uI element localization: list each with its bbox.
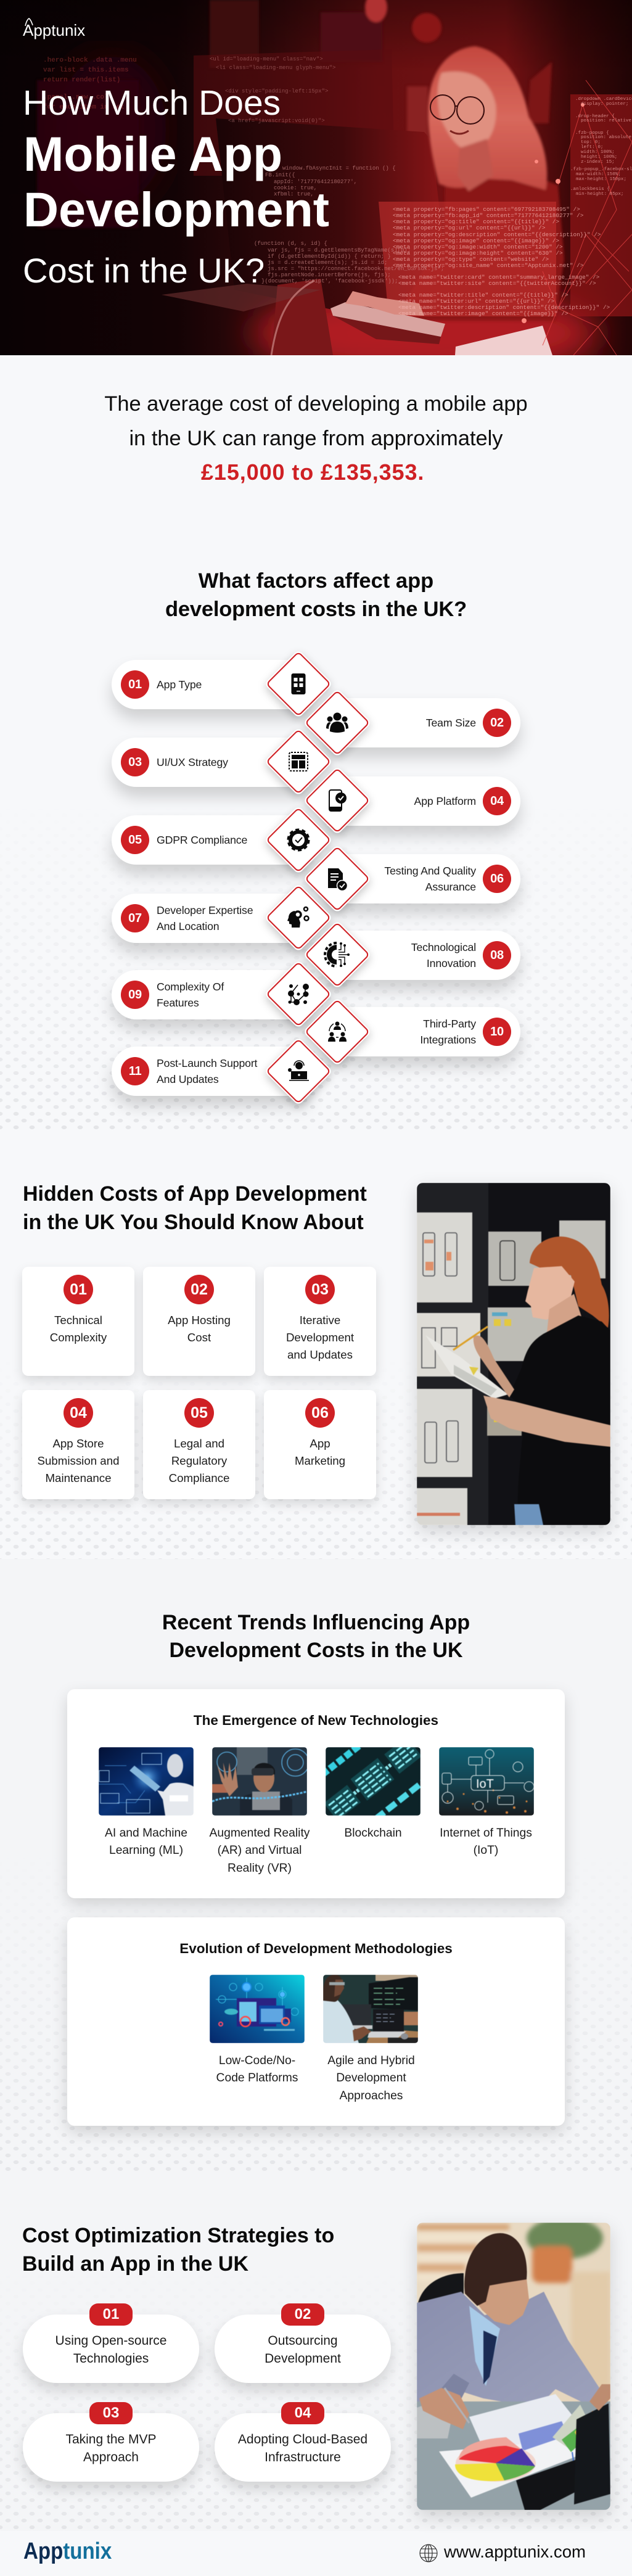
image: IoT: IoT (476, 1777, 494, 1791)
panel: hidden cost cards (18, 1273, 380, 1507)
caption: blockchain: Blockchain (344, 1827, 402, 1840)
card 02: Cost (187, 1331, 211, 1344)
hero photo: woman coding with red overlay: js.src = "https://connect.facebook.net/en_US/sdk.js"; (268, 266, 444, 272)
panel: strategy pills (18, 2303, 395, 2494)
caption: AR and VR: (AR) and Virtual (218, 1844, 302, 1857)
factor 06: Testing And Quality (384, 865, 476, 877)
card 04: App Store (52, 1437, 104, 1450)
strategy 01: 01 (103, 2306, 119, 2323)
caption: low-code platforms: Low-Code/No- (219, 2054, 295, 2067)
factor 09: 09 (128, 988, 142, 1002)
icon: technological innovation (302, 923, 372, 993)
hero photo: woman coding with red overlay: for each item in set (43, 104, 125, 111)
photo: woman reviewing wireframes (417, 1183, 610, 1525)
icon: developer expertise (263, 886, 334, 956)
code text: <meta name="twitter:card" content="summary_large_image" /> (398, 274, 600, 281)
factor 08: Innovation (427, 957, 476, 969)
hero photo: woman coding with red overlay: var js, fjs = d.getElementsByTagName(s)[0]; (268, 247, 411, 253)
card 04 (22, 1390, 134, 1499)
logo arc (25, 19, 33, 26)
hero photo: woman coding with red overlay: window.fbAsyncInit = function () { (282, 165, 396, 171)
section background: hidden costs (0, 1459, 632, 1559)
card 04: 04 (70, 1404, 87, 1422)
hero photo: woman coding with red overlay: appId: '717776412180277', (274, 179, 357, 185)
factor 11: Post-Launch Support (157, 1057, 257, 1069)
code text: <meta property="og:site_name" content="Apptunix.net" /> (393, 262, 584, 269)
code text: <meta name="twitter:description" content="{{description}}" /> (398, 304, 610, 311)
strategy 02 (210, 2303, 395, 2395)
factor 07: 07 (128, 911, 142, 925)
hero photo: woman coding with red overlay: <div style="padding-left:15px"> (225, 88, 328, 94)
caption: IoT (440, 1827, 532, 1857)
card 06: App (310, 1437, 330, 1450)
monitor (216, 118, 445, 321)
hero photo: woman coding with red overlay: top: 0; (581, 140, 601, 145)
caption: IoT: (IoT) (474, 1844, 498, 1857)
caption: low-code platforms: Code Platforms (216, 2072, 298, 2084)
hero photo: woman coding with red overlay: min-height: 85px; (576, 192, 623, 197)
card 03: Iterative (300, 1314, 340, 1327)
hero photo: woman coding with red overlay: .drop-header { (575, 114, 615, 119)
hero photo: woman coding with red overlay: max-height: 150px; (576, 177, 626, 182)
card 05: Compliance (169, 1471, 229, 1484)
hero photo: woman coding with red overlay: .anlockbesis { (570, 187, 610, 192)
code text: <meta property="og:title" content="{{title}}" /> (393, 218, 559, 225)
hero photo: woman coding with red overlay: height: 100%; (581, 155, 617, 160)
factor 07 (112, 894, 309, 943)
factor 07: And Location (157, 920, 219, 932)
hero photo: woman coding with red overlay: z-index: 15; (581, 160, 615, 165)
icon: third-party integrations (302, 999, 372, 1070)
hero photo: woman coding with red overlay: .hero-block .data .menu (43, 57, 137, 64)
icon: globe (419, 2545, 438, 2562)
card 06 (264, 1390, 376, 1499)
factor 01: 01 (128, 678, 142, 691)
code text: <meta property="fb:app_id" content="717776412180277" /> (393, 212, 584, 219)
heading: hidden costs (23, 1182, 367, 1234)
factor 04 (327, 776, 520, 826)
strategy 02: 02 (295, 2306, 311, 2323)
factor 07: Developer Expertise (157, 904, 253, 916)
factor 09 (112, 970, 309, 1019)
card 01 (22, 1267, 134, 1376)
caption: agile and hybrid: Approaches (340, 2089, 403, 2102)
hero photo: woman coding with red overlay: display: pointer; (581, 102, 628, 107)
logo: Apptunix (23, 21, 85, 39)
heading: hidden costs: in the UK You Should Know About (23, 1211, 364, 1234)
factor 01: App Type (157, 678, 202, 691)
woman (395, 46, 564, 321)
factor 09: Complexity Of (157, 981, 224, 993)
icon: testing and QA (302, 846, 372, 917)
hero photo: woman coding with red overlay: js = d.createElement(s); js.id = id; (268, 260, 387, 266)
factor 08 (327, 931, 520, 980)
strategy 04: Infrastructure (265, 2450, 341, 2464)
strategy 04 (210, 2402, 395, 2494)
translucent code panel (194, 49, 395, 176)
heading: cost optimization: Cost Optimization Strategies to (22, 2224, 334, 2247)
panel: evolution of development methodologies (67, 1917, 565, 2126)
code text: <meta property="og:image:height" content="630" /> (393, 250, 563, 257)
caption: AI and ML (105, 1827, 187, 1857)
factor 08: Technological (411, 941, 476, 953)
code text: <meta property="og:url" content="{{url}}" /> (393, 224, 546, 231)
factor 10: 10 (490, 1025, 504, 1039)
strategy 03: 03 (103, 2405, 119, 2421)
intro statement: in the UK can range from approximately (129, 427, 503, 450)
factor 10: Third-Party (423, 1018, 476, 1030)
heading: factors: What factors affect app (199, 569, 433, 593)
factor 03: UI/UX Strategy (157, 756, 228, 768)
icon: UI/UX strategy (263, 729, 334, 800)
caption: agile and hybrid: Development (336, 2072, 406, 2084)
factor 09: Features (157, 997, 199, 1009)
image: IoT (439, 1747, 534, 1816)
factor 08: 08 (490, 949, 504, 962)
image: agile and hybrid development (323, 1975, 418, 2043)
code text: <meta name="twitter:title" content="{{title}}" /> (398, 292, 568, 298)
image: low-code platforms (210, 1975, 305, 2043)
card 05: Legal and (174, 1437, 224, 1450)
hero photo: woman coding with red overlay (25, 0, 632, 1021)
card 01: Complexity (50, 1331, 107, 1344)
hero photo: woman coding with red overlay: cookie: true, (274, 185, 317, 191)
code text: <meta name="twitter:site" content="{{twitterAccount}}" /> (398, 280, 596, 287)
factor 06 (327, 854, 520, 903)
factor 02: 02 (490, 716, 504, 730)
caption: low-code platforms (216, 2054, 298, 2084)
factor 11 (112, 1047, 309, 1096)
caption: agile and hybrid (327, 2054, 415, 2102)
image: AR and VR (212, 1747, 307, 1816)
hands and keyboard (330, 302, 445, 337)
caption: IoT: Internet of Things (440, 1827, 532, 1840)
code text (393, 206, 610, 317)
photo: businessman reviewing charts (417, 2223, 610, 2510)
hero photo: woman coding with red overlay: <li class="loading-menu glyph-menu"> (216, 65, 335, 71)
hero photo: woman coding with red overlay: (function (d, s, id) { (254, 241, 327, 247)
heading: recent trends: Development Costs in the UK (169, 1639, 463, 1662)
code text: <meta property="og:image" content="{{image}}" /> (393, 237, 559, 244)
factor 10 (327, 1007, 520, 1056)
card 03 (264, 1267, 376, 1376)
caption: AR and VR (210, 1827, 310, 1875)
heading: cost optimization (22, 2224, 334, 2276)
code text: <meta property="og:description" content="{{description}}" /> (393, 231, 601, 238)
heading: recent trends (162, 1611, 470, 1662)
intro statement: The average cost of developing a mobile app (104, 392, 528, 416)
panel: emergence of new technologies (67, 1689, 565, 1898)
card 02 (143, 1267, 255, 1376)
bright code overlay (379, 202, 556, 316)
strategy 02: Development (265, 2351, 341, 2366)
hero photo: woman coding with red overlay: width: 100%; (581, 150, 615, 155)
card 02: 02 (191, 1281, 208, 1298)
hero photo: woman coding with red overlay: if (d.getElementById(id)) { return; } (268, 253, 391, 260)
caption: AR and VR: Reality (VR) (228, 1862, 292, 1875)
card 03: and Updates (287, 1348, 353, 1361)
heading: recent trends: Recent Trends Influencing App (162, 1611, 470, 1634)
strategy 03: Approach (83, 2450, 139, 2464)
strategy 03 (18, 2402, 203, 2494)
intro statement: £15,000 to £135,353. (201, 459, 424, 485)
hero photo: woman coding with red overlay: <a href="javascript:void(0)"> (228, 118, 325, 124)
website url: www.apptunix.com (444, 2542, 586, 2561)
heading: factors (165, 569, 467, 621)
icon: team size (302, 691, 372, 761)
strategy 01: Using Open-source (55, 2334, 166, 2348)
code text: <meta property="og:type" content="website" /> (393, 256, 549, 263)
factor 06: 06 (490, 872, 504, 886)
paper (455, 326, 552, 355)
icon: GDPR compliance (263, 808, 334, 878)
strategy 01: Technologies (73, 2351, 149, 2366)
hero photo: woman coding with red overlay: max-width: 150%; (576, 172, 621, 177)
hero photo: woman coding with red overlay: .fzb-popup { (575, 131, 609, 136)
image: blockchain (326, 1747, 421, 1816)
hero photo: woman coding with red overlay: left: 0; (581, 145, 603, 150)
icon: app platform (302, 768, 372, 839)
card 01: 01 (70, 1281, 87, 1298)
factor 11: 11 (129, 1064, 141, 1078)
code text: <meta property="og:image:width" content="1200" /> (393, 244, 563, 250)
hero title (23, 83, 329, 290)
icon: post-launch support (263, 1039, 334, 1109)
hero photo: woman coding with red overlay: <ul id="loading-menu" class="nav"> (210, 56, 323, 62)
factor 04: 04 (490, 794, 504, 808)
strategy 04: Adopting Cloud-Based (238, 2432, 367, 2446)
card 03: 03 (311, 1281, 329, 1298)
caption: AR and VR: Augmented Reality (210, 1827, 310, 1840)
caption: agile and hybrid: Agile and Hybrid (327, 2054, 415, 2067)
factor 02 (327, 698, 520, 747)
code text: <meta name="twitter:url" content="{{url}}" /> (398, 298, 555, 305)
caption: AI and ML: Learning (ML) (109, 1844, 183, 1857)
factor 11: And Updates (157, 1073, 219, 1085)
card 02: App Hosting (168, 1314, 231, 1327)
factor 10: Integrations (420, 1034, 476, 1046)
hero title: Mobile App (23, 127, 282, 181)
hero photo: woman coding with red overlay: return render(list) (43, 76, 120, 84)
network lines (543, 80, 632, 355)
hero title: Development (23, 182, 329, 237)
strategy 02: Outsourcing (268, 2334, 338, 2348)
card 05 (143, 1390, 255, 1499)
heading: hidden costs: Hidden Costs of App Development (23, 1182, 367, 1206)
footer logo: Apptunix (23, 2538, 112, 2564)
factor 05: GDPR Compliance (157, 834, 247, 846)
hero photo: woman coding with red overlay: FB.init({ (265, 172, 295, 178)
caption: AI and ML: AI and Machine (105, 1827, 187, 1840)
card 05: Regulatory (171, 1454, 227, 1467)
card 05: 05 (191, 1404, 208, 1422)
card 06: Marketing (295, 1454, 345, 1467)
stand and desk objects (271, 279, 333, 355)
factor 01 (112, 660, 309, 709)
factor 03: 03 (128, 755, 142, 769)
factor 05: 05 (128, 833, 142, 847)
card 01: Technical (54, 1314, 102, 1327)
panel: factor list (106, 652, 525, 1113)
intro statement (104, 392, 528, 485)
hero photo: woman coding with red overlay: xfbml: true, (274, 191, 314, 197)
hero title: Cost in the UK? (23, 250, 265, 290)
hero title: How Much Does (23, 83, 281, 123)
image: AI and ML (99, 1747, 194, 1816)
strategy 01 (18, 2303, 203, 2395)
hero banner (0, 0, 632, 355)
card 03: Development (286, 1331, 354, 1344)
dotted background: trends section (0, 2033, 632, 2171)
panel title: The Emergence of New Technologies (194, 1713, 438, 1728)
hero photo: woman coding with red overlay: var list = this.items (43, 67, 129, 74)
factor 02: Team Size (426, 717, 476, 729)
panel title: Evolution of Development Methodologies (179, 1941, 453, 1956)
icon: app type (263, 652, 334, 722)
dotted background: factors section (0, 971, 632, 1129)
factor 06: Assurance (425, 881, 476, 893)
hero photo: woman coding with red overlay: fjs.parentNode.insertBefore(js, fjs); (268, 272, 391, 278)
factor 04: App Platform (414, 795, 476, 807)
hero photo: woman coding with red overlay: }(document, 'script', 'facebook-jssdk')); (261, 278, 398, 284)
card 06: 06 (311, 1404, 329, 1422)
dotted background: cost optimization (0, 2418, 632, 2529)
icon: complexity of features (263, 962, 334, 1032)
strategy 04: 04 (295, 2405, 311, 2421)
hero photo: woman coding with red overlay: .panel .row .col (43, 94, 109, 101)
factor 05 (112, 815, 309, 865)
card 04: Submission and (38, 1454, 119, 1467)
code text: <meta property="fb:pages" content="697792183708495" /> (393, 206, 580, 213)
heading: cost optimization: Build an App in the UK (22, 2252, 248, 2276)
code text: <meta name="twitter:image" content="{{image}}" /> (398, 310, 568, 317)
heading: factors: development costs in the UK? (165, 598, 467, 621)
strategy 03: Taking the MVP (65, 2432, 157, 2446)
factor 03 (112, 738, 309, 787)
card 04: Maintenance (45, 1471, 111, 1484)
